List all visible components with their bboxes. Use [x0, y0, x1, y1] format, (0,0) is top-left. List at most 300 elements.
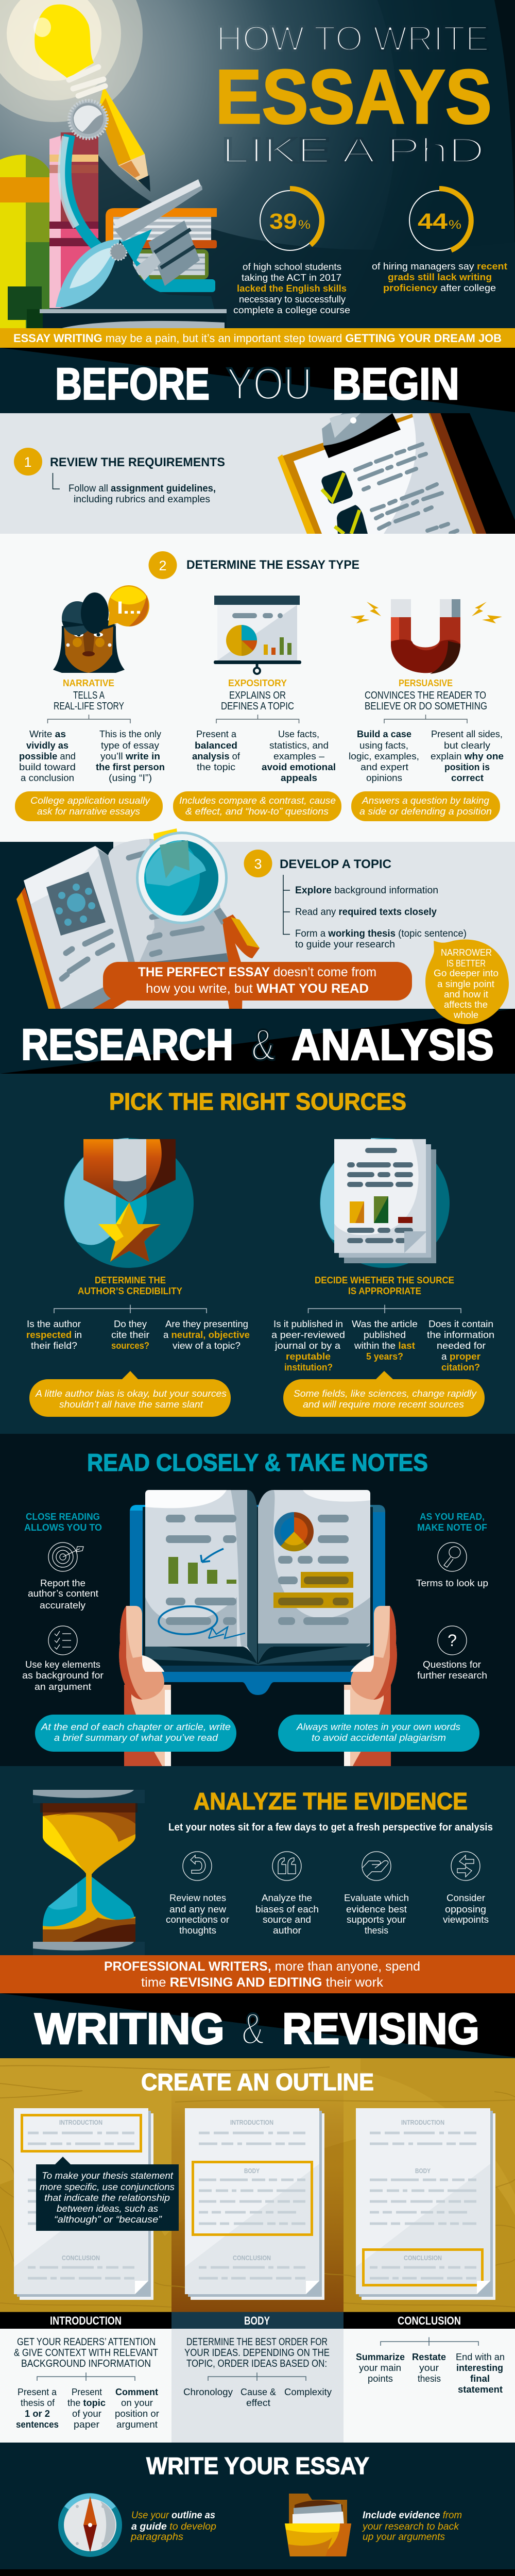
item: evaluate evidence: thesis — [365, 1925, 388, 1936]
column: introduction: Present — [72, 2386, 102, 2397]
column: conclusion: interesting — [456, 2362, 503, 2373]
icon: book stack — [106, 208, 217, 292]
stat: 39 percent: 39 — [269, 209, 297, 234]
callout: own words: Always write notes in your own words — [296, 1721, 460, 1732]
column: body: Chronology — [183, 2386, 233, 2397]
title line: like a phd: LIKE A PhD — [221, 131, 485, 170]
heading: pick the right sources: PICK THE RIGHT SOURCES — [109, 1088, 406, 1115]
panel: write your essay — [0, 2443, 515, 2569]
item: opposing viewpoints — [443, 1852, 489, 1925]
icon: question mark — [438, 1626, 467, 1655]
text: source questions: within the last — [354, 1340, 415, 1351]
icon: green book — [0, 155, 49, 328]
heading: research and analysis — [0, 1009, 515, 1074]
callout: narrower is better: IS BETTER — [447, 958, 486, 969]
column: introduction: sentences — [16, 2419, 59, 2430]
banner: dream job — [0, 328, 515, 348]
icon: target — [48, 1543, 83, 1571]
callout: write a summary: At the end of each chapter or article, write — [41, 1721, 231, 1732]
column: introduction: argument — [116, 2419, 158, 2430]
panel: pick the right sources — [0, 1074, 515, 1434]
column: expository: Present a — [196, 728, 237, 739]
column: persuasive: explain why one — [431, 751, 504, 761]
heading: research and analysis: RESEARCH — [21, 1021, 233, 1070]
column: introduction: paper — [74, 2419, 99, 2430]
panel: step 2 determine the essay type — [0, 534, 515, 842]
stat: 39 percent: complete a college course — [233, 305, 350, 315]
title — [215, 19, 492, 170]
item: analyze biases — [255, 1852, 319, 1936]
column: narrative: REAL-LIFE STORY — [54, 701, 124, 712]
text: source questions: reputable — [286, 1351, 331, 1362]
callout: narrative: ask for narrative essays — [37, 806, 140, 817]
text: author questions: Is the author — [27, 1318, 81, 1329]
column: expository: EXPOSITORY — [228, 678, 287, 688]
item: evaluate evidence: supports your — [347, 1914, 406, 1925]
icon: right hand — [351, 1606, 397, 1700]
column: narrative: the first person — [96, 761, 165, 772]
illustration: open book held by hands — [119, 1490, 397, 1766]
column: conclusion: Restate — [412, 2351, 446, 2362]
stat: 44 percent: % — [449, 218, 461, 232]
icon: magnet — [350, 599, 502, 674]
panel: read closely and take notes — [0, 1434, 515, 1766]
callout: write a summary: a brief summary of what you’ve read — [54, 1732, 218, 1743]
callout: narrower is better: affects the — [444, 999, 488, 1010]
text: author questions: respected in — [26, 1329, 82, 1340]
column: narrative: (using “I”) — [109, 772, 152, 783]
list: topic steps: to guide your research — [295, 939, 395, 950]
column: body: effect — [246, 2397, 270, 2408]
panel: cite your sources — [0, 2569, 515, 2576]
column: expository: analysis of — [192, 751, 241, 761]
text: use your outline — [130, 2510, 216, 2543]
text: assignment guidelines — [68, 483, 216, 505]
item: opposing viewpoints: opposing — [445, 1904, 486, 1914]
icon: light bulb — [33, 5, 105, 96]
column: expository: DEFINES A TOPIC — [221, 701, 294, 712]
heading: review the requirements: REVIEW THE REQUIREMENTS — [50, 455, 225, 469]
column: introduction: on your — [121, 2397, 153, 2408]
title line: how to write: HOW TO WRITE — [216, 19, 489, 58]
column: introduction — [0, 2312, 171, 2430]
list: close reading allows you to: Use key elements — [25, 1659, 100, 1670]
list: topic steps: Explore background information — [295, 885, 438, 896]
heading: develop a topic: DEVELOP A TOPIC — [280, 857, 391, 871]
text: author questions: Do they — [114, 1318, 147, 1329]
text: source questions: a proper — [441, 1351, 480, 1362]
column: persuasive: opinions — [366, 772, 402, 783]
column: body: YOUR IDEAS. DEPENDING ON THE — [184, 2347, 330, 2359]
list: close reading allows you to: Report the — [40, 1578, 85, 1588]
item: review notes: thoughts — [179, 1925, 216, 1936]
heading: research and analysis: ANALYSIS — [291, 1021, 494, 1070]
text: author questions — [26, 1318, 250, 1351]
stat: 44 percent: grads still lack writing — [388, 272, 492, 282]
text: source questions: the information — [427, 1329, 494, 1340]
callout: author bias — [29, 1371, 231, 1417]
heading: write your essay: WRITE YOUR ESSAY — [146, 2452, 369, 2479]
column: persuasive: Present all sides, — [431, 728, 503, 739]
icon: pencil — [98, 86, 150, 192]
panel: step 1 review the requirements — [0, 413, 515, 534]
table: outline sections — [0, 2312, 515, 2443]
column: persuasive: Build a case — [357, 728, 411, 739]
heading: research and analysis: & — [251, 1021, 275, 1070]
document: conclusion highlighted: CONCLUSION — [404, 2254, 442, 2262]
column: expository: EXPLAINS OR — [229, 690, 286, 701]
list: topic steps: Read any required texts closely — [295, 907, 437, 918]
document: body highlighted: CONCLUSION — [233, 2254, 271, 2262]
heading: before you begin — [0, 348, 515, 413]
icon: checklist — [48, 1626, 77, 1655]
icon: compass — [58, 2493, 122, 2557]
list: as you read make note of: further research — [417, 1670, 487, 1681]
column: introduction: the topic — [67, 2397, 106, 2408]
icon: medal — [64, 1138, 194, 1268]
text: source questions: Does it contain — [428, 1318, 493, 1329]
text: assignment guidelines: Follow all assignment guidelines, — [68, 483, 216, 494]
icon: book cover and pages — [129, 1490, 386, 1695]
item: evaluate evidence: Evaluate which — [344, 1892, 409, 1903]
stat: 39 percent: taking the ACT in 2017 — [242, 273, 341, 283]
column: conclusion: statement — [458, 2384, 503, 2395]
stat: 39 percent: lacked the English skills — [237, 283, 347, 294]
column heading: source appropriate: DECIDE WHETHER THE SOURCE — [315, 1275, 454, 1285]
column: narrative: a conclusion — [21, 772, 74, 783]
column: body: Complexity — [284, 2386, 332, 2397]
callout: narrower is better: Go deeper into — [434, 968, 499, 978]
column heading: author credibility — [78, 1275, 182, 1296]
item: analyze biases: Analyze the — [262, 1892, 312, 1903]
callout: expository — [173, 791, 341, 821]
heading: before you begin: YOU — [227, 359, 312, 409]
icon: presentation screen — [214, 596, 301, 674]
column: persuasive: BELIEVE OR DO SOMETHING — [365, 701, 487, 712]
heading: before you begin: BEGIN — [332, 359, 459, 409]
list: close reading allows you to — [22, 1512, 104, 1692]
text: source questions: citation? — [441, 1362, 480, 1372]
document: body highlighted: BODY — [244, 2167, 260, 2175]
column: body: DETERMINE THE BEST ORDER FOR — [186, 2336, 328, 2348]
text: include evidence: up your arguments — [363, 2532, 445, 2543]
heading: writing and revising — [0, 1993, 515, 2058]
document: body highlighted: INTRODUCTION — [230, 2119, 273, 2126]
stat: 44 percent: proficiency after college — [383, 283, 496, 293]
list: as you read make note of: MAKE NOTE OF — [417, 1522, 487, 1533]
banner: professional writers — [0, 1955, 515, 1993]
list: close reading allows you to: CLOSE READING — [26, 1512, 100, 1522]
number badge 1: 1 — [24, 454, 32, 470]
callout: perfect essay — [103, 962, 412, 1001]
heading: before you begin: BEFORE — [55, 359, 210, 409]
text: author questions: Are they presenting — [165, 1318, 248, 1329]
column: persuasive — [349, 678, 504, 783]
stat: 39 percent: of high school students — [243, 262, 341, 272]
column: narrative: TELLS A — [73, 690, 105, 701]
banner: professional writers: time REVISING AND EDITING their work — [141, 1975, 384, 1990]
column: expository: examples – — [273, 751, 325, 761]
column: persuasive: and expert — [360, 761, 408, 772]
document: introduction highlighted: CONCLUSION — [62, 2254, 100, 2262]
text: source questions: Is it published in — [273, 1318, 343, 1329]
column: conclusion: End with an — [456, 2351, 505, 2362]
column: persuasive: but clearly — [444, 740, 491, 751]
icon: hourglass — [33, 1790, 145, 1955]
column: introduction: thesis of — [21, 2397, 55, 2408]
document: introduction highlighted: INTRODUCTION — [59, 2119, 102, 2126]
icon: magnifier — [438, 1543, 467, 1571]
column heading: source appropriate: IS APPROPRIATE — [348, 1286, 421, 1296]
item: analyze biases: biases of each — [255, 1904, 319, 1914]
column: persuasive: PERSUASIVE — [399, 678, 453, 688]
text: use your outline: a guide to develop — [131, 2521, 216, 2532]
list: as you read make note of: AS YOU READ, — [420, 1512, 485, 1522]
text: author questions: a neutral, objective — [163, 1329, 250, 1340]
icon: clipboard — [278, 413, 515, 534]
text: use your outline: paragraphs — [130, 2532, 184, 2543]
callout: thesis tip: that indicate the relationship — [44, 2192, 170, 2203]
icon: page notes — [158, 1512, 353, 1638]
icon: open book with magnifier — [16, 828, 260, 1009]
callout: narrative — [15, 791, 163, 821]
column: expository: avoid emotional — [262, 761, 336, 772]
text: source questions: 5 years? — [366, 1351, 403, 1362]
list: topic steps: Form a working thesis (topic sentence) — [295, 928, 467, 939]
icon: left arm — [124, 1685, 171, 1766]
text: author questions: their field? — [31, 1340, 77, 1351]
heading: writing and revising: WRITING — [35, 2005, 225, 2054]
callout: expository: & effect, and “how-to” questions — [185, 806, 329, 817]
callout: narrower is better: whole — [453, 1010, 478, 1020]
column: body: TOPIC, ORDER IDEAS BASED ON: — [186, 2358, 327, 2369]
column: body — [171, 2312, 344, 2408]
panel: step 3 develop a topic — [0, 828, 515, 1009]
document: body highlighted — [185, 2108, 324, 2300]
icon: lamp shade — [113, 179, 202, 289]
icon: folder — [285, 2494, 351, 2556]
text: include evidence: your research to back — [362, 2521, 460, 2532]
banner: dream job: ESSAY WRITING may be a pain, but it’s an important step toward GETTING YOUR DREAM JOB — [13, 332, 502, 345]
column: narrative: you’ll write in — [100, 751, 160, 761]
callout: own words: to avoid accidental plagiarism — [312, 1732, 446, 1743]
column: introduction: position or — [115, 2408, 159, 2419]
item: review notes — [166, 1852, 229, 1936]
column: persuasive: logic, examples, — [349, 751, 419, 761]
icon: narrator woman — [53, 585, 149, 673]
list: as you read make note of: Questions for — [423, 1659, 481, 1670]
list: close reading allows you to: accurately — [40, 1600, 86, 1611]
text: source questions: Was the article — [352, 1318, 418, 1329]
icon: right arm — [344, 1685, 391, 1766]
callout: thesis tip: “although” or “because” — [54, 2214, 162, 2225]
text: include evidence — [362, 2510, 462, 2543]
item: opposing viewpoints: Consider — [447, 1892, 485, 1903]
list: as you read make note of — [416, 1512, 488, 1681]
callout: thesis tip: To make your thesis statement — [42, 2170, 174, 2181]
column: persuasive: position is — [444, 761, 490, 772]
column: expository: Use facts, — [278, 728, 319, 739]
stat: 39 percent: % — [298, 218, 311, 232]
column heading: author credibility: DETERMINE THE — [95, 1275, 166, 1285]
text: author questions: cite their — [111, 1329, 149, 1340]
callout: own words — [278, 1715, 479, 1752]
column: narrative: NARRATIVE — [63, 678, 114, 688]
column: expository: statistics, and — [269, 740, 329, 751]
text: source questions — [271, 1318, 494, 1372]
number badge 3 — [244, 850, 272, 877]
icon: lamp base — [40, 240, 227, 328]
text: assignment guidelines: including rubrics and examples — [74, 494, 210, 505]
callout: narrower is better: a single point — [437, 979, 494, 989]
text: author questions: view of a topic? — [173, 1340, 241, 1351]
column: introduction: & GIVE CONTEXT WITH RELEVANT — [14, 2347, 158, 2359]
icon: lamp arm — [66, 135, 103, 252]
column: expository: the topic — [197, 761, 235, 772]
callout: recent sources — [283, 1371, 485, 1417]
stat: 44 percent: of hiring managers say recent — [372, 261, 507, 272]
text: author questions: sources? — [111, 1340, 149, 1351]
text: use your outline: Use your outline as — [131, 2510, 215, 2521]
icon: documents — [320, 1138, 450, 1268]
column: introduction: GET YOUR READERS’ ATTENTION — [17, 2336, 156, 2348]
column heading: source appropriate — [315, 1275, 454, 1296]
callout: recent sources: and will require more recent sources — [303, 1399, 464, 1410]
panel: hero background — [0, 0, 515, 330]
callout: thesis tip — [36, 2157, 179, 2231]
panel: create an outline — [0, 2058, 515, 2312]
item: review notes: and any new — [169, 1904, 227, 1914]
callout: persuasive: Answers a question by taking — [362, 795, 490, 806]
column: introduction: of your — [72, 2408, 101, 2419]
column: introduction: INTRODUCTION — [50, 2314, 122, 2327]
column: narrative: Write as — [29, 728, 66, 739]
column: persuasive: using facts, — [359, 740, 408, 751]
heading: determine the essay type: DETERMINE THE ESSAY TYPE — [186, 558, 359, 572]
callout: narrative: College application usually — [30, 795, 151, 806]
column: introduction: Comment — [115, 2386, 158, 2397]
stat: 39 percent: necessary to successfully — [239, 294, 346, 304]
callout: expository: Includes compare & contrast, cause — [179, 795, 336, 806]
banner: professional writers: PROFESSIONAL WRITERS, more than anyone, spend — [104, 1959, 420, 1974]
callout: persuasive: a side or defending a position — [359, 806, 492, 817]
heading: read closely: READ CLOSELY & TAKE NOTES — [87, 1449, 428, 1476]
column: persuasive: CONVINCES THE READER TO — [365, 690, 486, 701]
text: include evidence: Include evidence from — [363, 2510, 462, 2521]
column: conclusion: points — [368, 2373, 393, 2384]
column: body: BODY — [244, 2314, 270, 2327]
icon: narrator woman: I... — [117, 598, 142, 618]
callout: author bias: shouldn’t all have the same slant — [59, 1399, 203, 1410]
heading: writing and revising: & — [242, 2005, 264, 2054]
column: body: Cause & — [241, 2386, 277, 2397]
text: source questions: institution? — [284, 1362, 333, 1372]
callout: author bias: A little author bias is okay, but your sources — [35, 1388, 227, 1399]
column: narrative: This is the only — [99, 728, 162, 739]
column: conclusion — [344, 2312, 515, 2395]
document: conclusion highlighted: BODY — [415, 2167, 431, 2175]
column: persuasive: correct — [451, 772, 484, 783]
item: review notes: connections or — [166, 1914, 229, 1925]
text: source questions: published — [364, 1329, 406, 1340]
callout: narrower is better: and how it — [444, 989, 488, 999]
number badge 2 — [148, 551, 177, 579]
column: narrative: build toward — [19, 761, 76, 772]
column: conclusion: your main — [359, 2362, 401, 2373]
icon: left hand — [119, 1606, 164, 1700]
column: expository: balanced — [195, 740, 237, 751]
document: introduction highlighted — [14, 2108, 179, 2300]
heading: analyze the evidence: ANALYZE THE EVIDENCE — [194, 1788, 468, 1815]
column: conclusion: CONCLUSION — [398, 2314, 461, 2327]
document: conclusion highlighted — [356, 2108, 495, 2300]
column: narrative: possible and — [19, 751, 76, 761]
column: introduction: BACKGROUND INFORMATION — [21, 2358, 151, 2369]
item: evaluate evidence: evidence best — [346, 1904, 407, 1914]
heading: create an outline: CREATE AN OUTLINE — [141, 2069, 374, 2095]
callout: thesis tip: more specific, use conjunctions — [40, 2181, 175, 2192]
list: as you read make note of: Terms to look up — [416, 1578, 488, 1588]
stat: 44 percent: 44 — [418, 209, 448, 234]
text: source questions: journal or by a — [274, 1340, 341, 1351]
document: conclusion highlighted: INTRODUCTION — [401, 2119, 444, 2126]
item: analyze biases: author — [273, 1925, 301, 1936]
column: conclusion: your — [419, 2362, 439, 2373]
item: opposing viewpoints: viewpoints — [443, 1914, 489, 1925]
callout: narrower is better — [425, 940, 509, 1024]
callout: persuasive — [351, 791, 500, 821]
number badge 1 — [14, 448, 42, 476]
title line: essays: ESSAYS — [215, 54, 492, 140]
callout: perfect essay: THE PERFECT ESSAY doesn’t come from — [138, 965, 376, 979]
text: source questions: a peer-reviewed — [271, 1329, 345, 1340]
stat: 44 percent — [372, 189, 507, 293]
callout: narrower is better: NARROWER — [441, 947, 492, 958]
list: close reading allows you to: as background for — [22, 1670, 104, 1681]
list: close reading allows you to: an argument — [35, 1681, 91, 1692]
subheading: Let your notes sit for a few days to get a fresh perspective for analysis — [168, 1822, 493, 1833]
illustration: lamp, light bulb, pencil and books — [0, 5, 227, 328]
item: evaluate evidence — [344, 1852, 409, 1936]
list: close reading allows you to: ALLOWS YOU TO — [24, 1522, 102, 1533]
callout: write a summary — [35, 1715, 236, 1752]
callout: recent sources: Some fields, like sciences, change rapidly — [294, 1388, 477, 1399]
column: narrative — [19, 678, 165, 783]
stat: 39 percent — [233, 189, 350, 315]
panel: analyze the evidence — [0, 1766, 515, 1955]
column heading: author credibility: AUTHOR’S CREDIBILITY — [78, 1286, 182, 1296]
list: topic steps — [295, 885, 467, 950]
text: source questions: needed for — [437, 1340, 486, 1351]
column: expository — [192, 678, 336, 783]
number badge 2: 2 — [159, 558, 167, 573]
heading: writing and revising: REVISING — [282, 2005, 479, 2054]
callout: thesis tip: between ideas, such as — [57, 2203, 158, 2214]
column: narrative: vividly as — [26, 740, 68, 751]
item: review notes: Review notes — [169, 1892, 226, 1903]
icon: question mark: ? — [448, 1631, 457, 1650]
icon: pink book — [49, 132, 98, 308]
column: conclusion: Summarize — [356, 2351, 405, 2362]
list: close reading allows you to: author’s content — [28, 1588, 98, 1599]
column: conclusion: thesis — [418, 2373, 441, 2384]
column: conclusion: final — [470, 2373, 490, 2384]
column: expository: appeals — [281, 772, 317, 783]
column: introduction: 1 or 2 — [25, 2408, 50, 2419]
icon: gear — [69, 100, 107, 139]
column: introduction: Present a — [18, 2386, 57, 2397]
column: narrative: type of essay — [101, 740, 160, 751]
